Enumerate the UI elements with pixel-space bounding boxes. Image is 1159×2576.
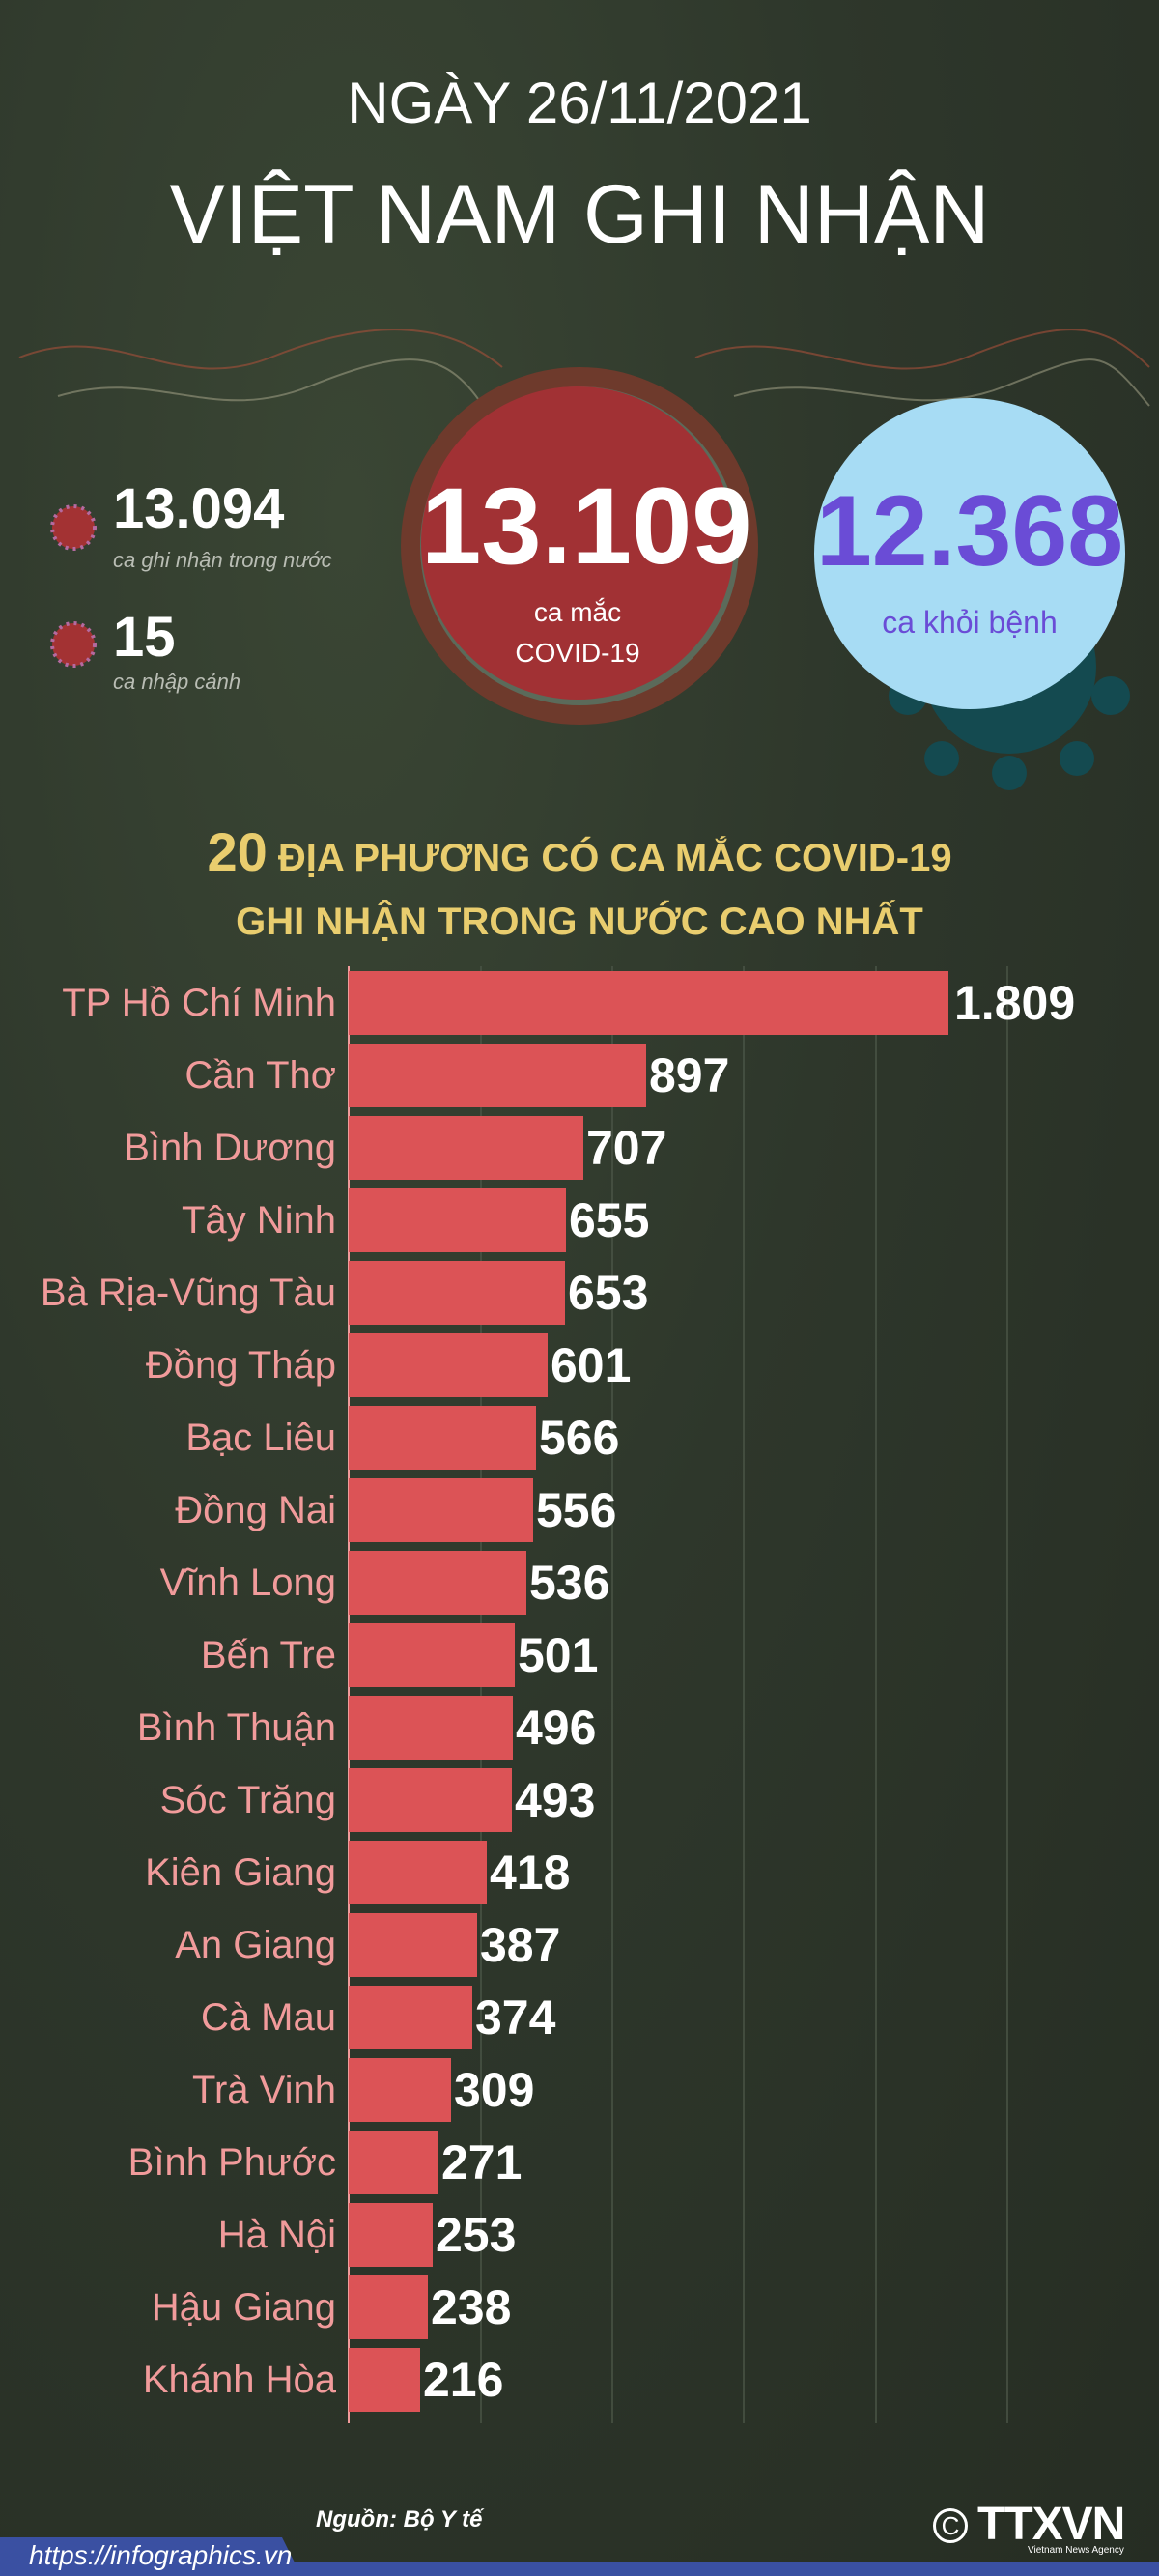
bar chart rows: Tây Ninh [182,1199,336,1242]
bar chart rows: Trà Vinh [192,2069,336,2111]
footer band [0,2537,1159,2576]
bar chart rows: Khánh Hòa [143,2359,336,2401]
circle: total cases: ca mắc [534,597,621,627]
circle: recovered: 12.368 [816,475,1123,587]
chart heading [207,821,952,943]
bar chart rows: Sóc Trăng [160,1779,336,1821]
bar chart rows: 536 [529,1556,609,1610]
chart heading: 20 ĐỊA PHƯƠNG CÓ CA MẮC COVID-19 [207,821,952,882]
circle: recovered: ca khỏi bệnh [882,605,1058,640]
logo: TTXVN: Vietnam News Agency [1028,2545,1124,2556]
bar chart rows: Cần Thơ [184,1054,336,1097]
bar chart rows: 387 [480,1918,560,1972]
logo: TTXVN [933,2499,1124,2556]
logo: TTXVN: TTXVN [977,2499,1124,2550]
title: date: NGÀY 26/11/2021 [347,71,812,135]
bar chart rows: Kiên Giang [145,1851,336,1894]
stat: domestic cases [50,477,332,572]
bar chart rows: 238 [431,2280,511,2334]
bar chart rows: 653 [568,1266,648,1320]
bar chart rows: Cà Mau [201,1996,336,2039]
bar chart rows: 418 [490,1846,570,1900]
bar chart rows: 1.809 [954,976,1075,1030]
circle: total cases: 13.109 [421,466,752,587]
bar chart rows: 309 [454,2063,534,2117]
bar chart rows: 216 [423,2353,503,2407]
title: main: VIỆT NAM GHI NHẬN [170,168,989,261]
stat: imported cases: 15 [113,606,176,669]
bar chart rows: TP Hồ Chí Minh [62,982,336,1024]
bar chart rows: Hậu Giang [152,2286,336,2329]
bar chart rows: 601 [551,1338,631,1392]
bar chart rows: 556 [536,1483,616,1537]
icon: blue virus [889,647,1130,790]
footer url: https://infographics.vn [29,2540,292,2570]
bar chart rows: 655 [569,1193,649,1247]
source note: Nguồn: Bộ Y tế [316,2506,482,2533]
bar chart rows: 566 [539,1411,619,1465]
bar chart rows: Bình Phước [128,2141,336,2184]
bar chart rows: Bạc Liêu [185,1417,336,1459]
bar chart rows: Vĩnh Long [160,1561,336,1604]
bar chart rows: 374 [475,1990,555,2045]
circle: total cases: COVID-19 [515,638,640,668]
bar chart rows: 501 [518,1628,598,1682]
chart heading: GHI NHẬN TRONG NƯỚC CAO NHẤT [236,901,923,943]
stat: imported cases: ca nhập cảnh [113,670,240,694]
bar chart rows: Bình Thuận [137,1706,336,1749]
icon: virus red small [50,621,97,668]
bar chart rows [41,971,1075,2412]
bar chart rows: 897 [649,1048,729,1102]
stat: domestic cases: 13.094 [113,477,284,540]
bar chart rows: An Giang [175,1924,336,1966]
stat: domestic cases: ca ghi nhận trong nước [113,548,332,572]
circle: total cases [421,386,734,700]
bar chart rows: 253 [436,2208,516,2262]
bar chart rows: Đồng Nai [175,1489,336,1531]
bar chart [348,966,350,2423]
bar chart rows: 707 [586,1121,666,1175]
bar chart rows: Bà Rịa-Vũng Tàu [41,1272,336,1314]
logo: TTXVN: C [942,2511,959,2540]
circle: recovered [814,398,1125,709]
virus graphic behind red circle [401,367,758,725]
bar chart rows: 493 [515,1773,595,1827]
stat: imported cases [50,606,240,694]
bar chart rows: Bến Tre [201,1634,336,1676]
bar chart rows: Bình Dương [124,1127,336,1169]
bar chart rows: Đồng Tháp [146,1344,336,1387]
icon: virus red [50,504,97,551]
bar chart rows: Hà Nội [218,2214,336,2256]
bar chart rows: 496 [516,1701,596,1755]
bar chart rows: 271 [441,2135,522,2190]
